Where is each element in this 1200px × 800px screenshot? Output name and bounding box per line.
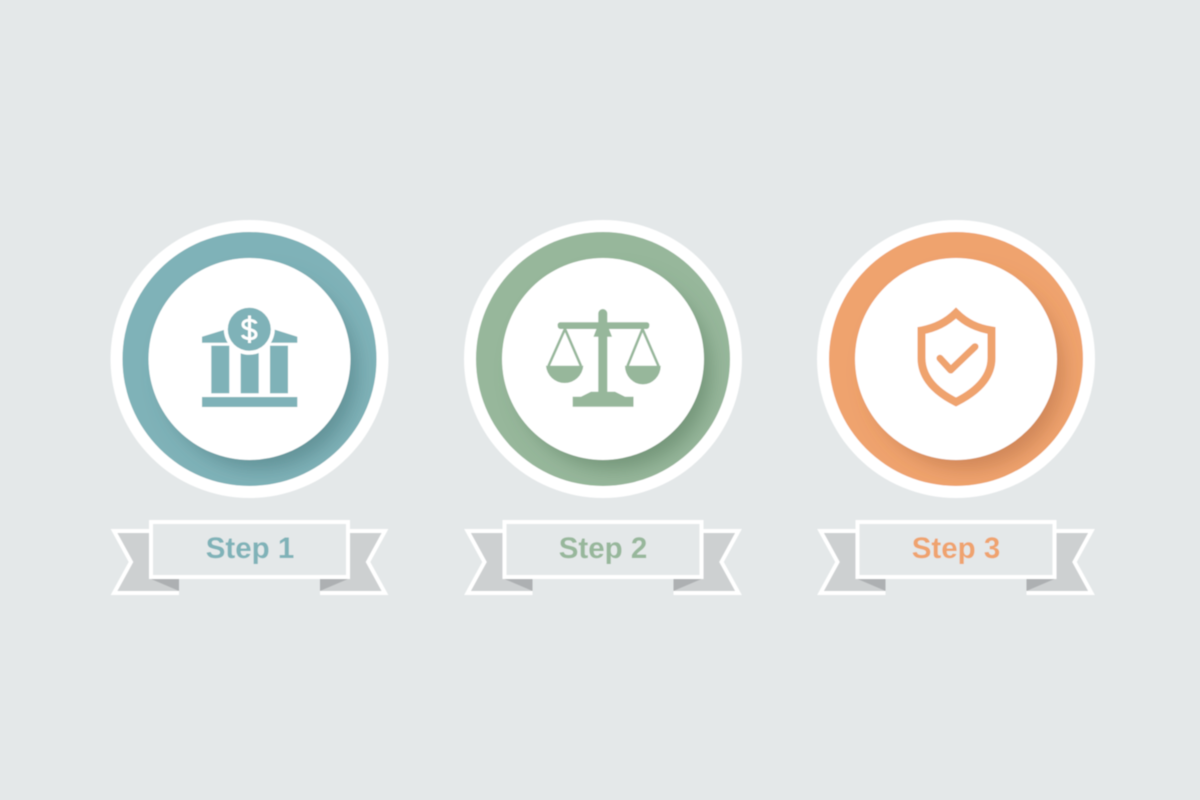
label: step 2: Step 2 [559,532,647,565]
ribbon: step 3 [820,522,1092,593]
step 1 [110,220,388,593]
step 2 [464,220,742,593]
icon: shield with check [922,313,992,402]
step 3 [817,220,1095,593]
label: step 1: Step 1 [206,532,294,565]
infographic: three step badges [110,220,1096,596]
badge: step 3 ring [817,220,1095,498]
badge: step 1 ring [110,220,388,498]
label: step 3: Step 3 [912,532,1000,565]
icon: bank with dollar coin [202,304,297,407]
icon: balance scale [546,309,661,407]
ribbon: step 1 [114,522,385,593]
badge: step 2 ring [464,220,742,498]
ribbon: step 2 [468,522,738,593]
